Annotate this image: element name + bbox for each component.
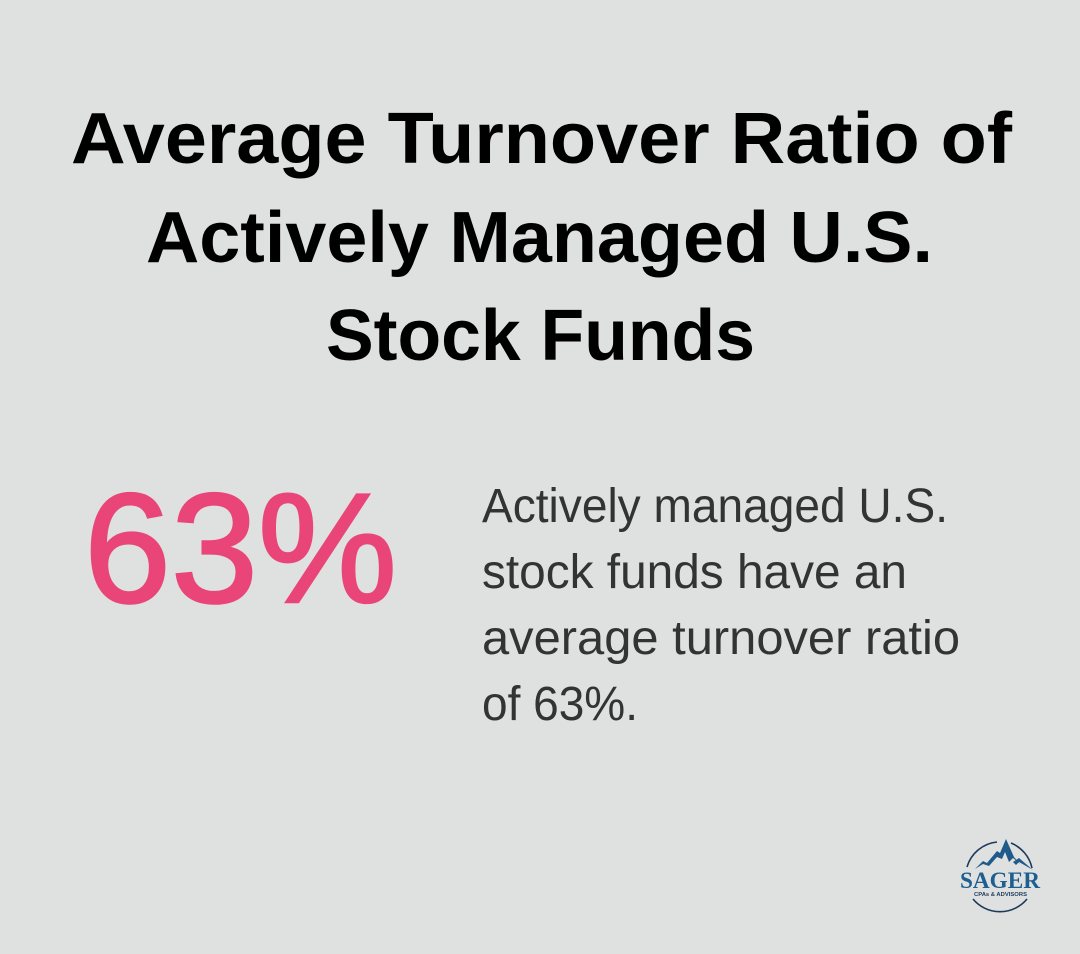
logo ring — [967, 842, 1032, 912]
logo mountain — [975, 839, 1033, 870]
description text: average turnover ratio — [482, 612, 960, 665]
title: Average Turnover Ratio of — [71, 99, 1013, 179]
big statistic: 63%: 63% — [84, 462, 397, 636]
logo: Sager CPAs & Advisors — [960, 839, 1040, 912]
title: Stock Funds — [326, 296, 755, 376]
title: Actively Managed U.S. — [146, 198, 933, 278]
title — [71, 99, 1013, 376]
description text: of 63%. — [482, 678, 638, 731]
description text: Actively managed U.S. — [482, 480, 948, 533]
description text — [482, 480, 960, 731]
logo tagline: CPAs & ADVISORS — [974, 892, 1027, 898]
logo wordmark: SAGER — [960, 868, 1040, 893]
description text: stock funds have an — [482, 546, 907, 599]
